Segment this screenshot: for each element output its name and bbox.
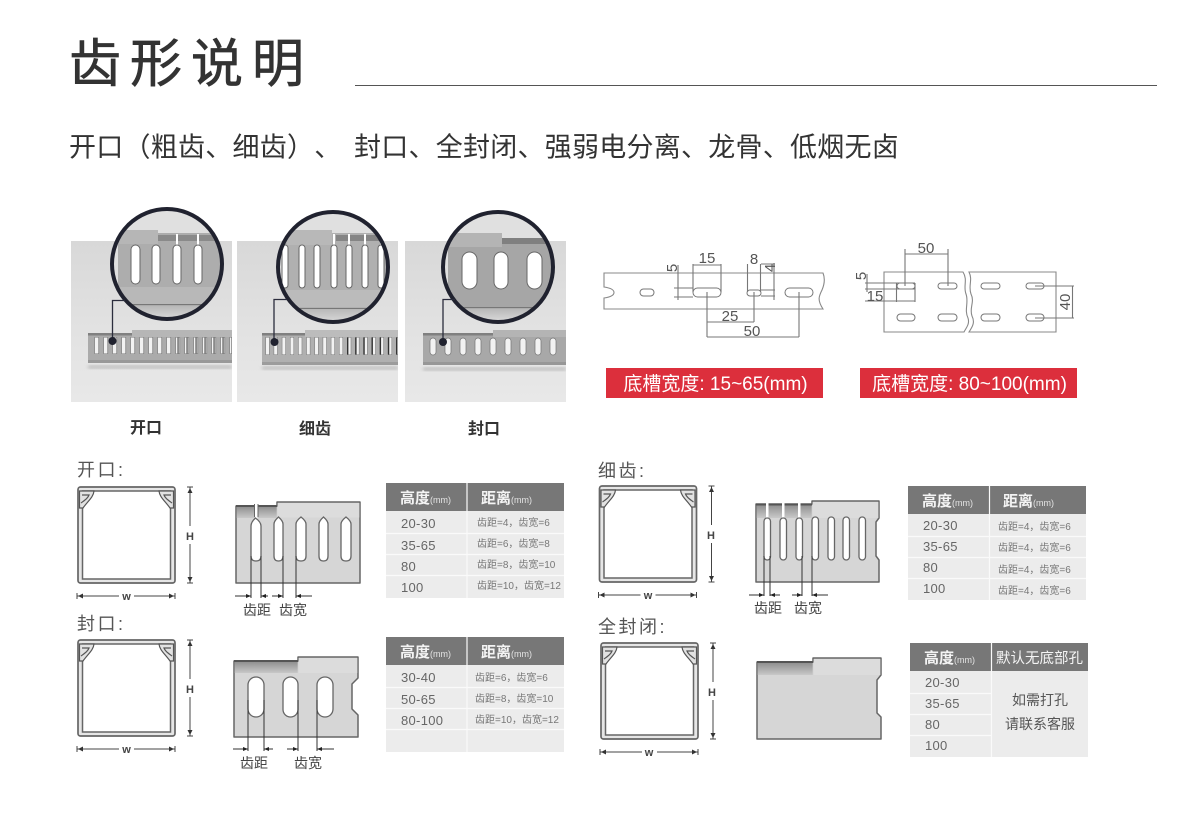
table: fully closed: 高度(mm) [924, 649, 975, 667]
table: closed: 距离(mm) [481, 643, 532, 661]
cross section: closed: w [121, 744, 131, 756]
cross section: open [77, 487, 194, 603]
leader line [439, 300, 455, 346]
dimension labels: open [243, 602, 307, 618]
callout: 80-100 mm [860, 368, 1077, 398]
trunking strip [262, 330, 398, 370]
table: fine tooth: 20-30 [923, 518, 958, 533]
photo caption: closed: 封口 [468, 420, 500, 438]
table: fully closed: 35-65 [925, 696, 960, 711]
photo caption: open: 开口 [130, 420, 162, 437]
table: closed: 齿距=8，齿宽=10 [475, 692, 554, 705]
heading: fine tooth: 细齿: [598, 461, 647, 481]
technical drawing: 80-100 mm base slots [853, 240, 1074, 332]
dimension: 5: 5 [664, 264, 681, 272]
table: open: 齿距=6，齿宽=8 [477, 537, 550, 550]
heading: open: 开口: [77, 460, 126, 480]
tooth drawing: fine tooth [749, 501, 879, 597]
table: open [386, 483, 564, 598]
table: closed: 高度(mm) [400, 643, 451, 661]
leader line [108, 300, 125, 345]
dimension: 15: 15 [867, 288, 883, 305]
table: fine tooth: 齿距=4，齿宽=6 [998, 584, 1071, 597]
heading: fully closed: 全封闭: [598, 617, 667, 637]
panel: closed slot photo [405, 208, 566, 402]
magnifier [440, 208, 555, 328]
tooth drawing: open [235, 502, 360, 598]
cross section: fine tooth [598, 486, 715, 602]
table: fully closed [910, 643, 1088, 757]
table: open: 80 [401, 559, 416, 574]
dimension: 25: 25 [722, 308, 738, 325]
callout: 15-65 mm: 底槽宽度: 15~65(mm) [623, 373, 808, 395]
table: open: 齿距=4，齿宽=6 [477, 516, 550, 529]
cross section: fully closed: w [644, 747, 654, 759]
table: open: 齿距=10，齿宽=12 [477, 579, 561, 592]
table: closed: 30-40 [401, 670, 436, 685]
magnifier [276, 210, 390, 324]
dimension: 4: 4 [762, 264, 779, 272]
table: closed: 80-100 [401, 713, 443, 728]
subtitle: slot types and features: 开口（粗齿、细齿）、 [69, 132, 342, 162]
panel: fine tooth photo [237, 208, 398, 402]
table: fine tooth: 高度(mm) [922, 492, 973, 510]
technical drawing: 15-65 mm base slots [604, 250, 824, 340]
cross section: fully closed: H [708, 687, 716, 699]
dimension labels: closed: 齿宽 [294, 755, 322, 771]
table: fine tooth: 100 [923, 581, 946, 596]
table: closed: 齿距=10，齿宽=12 [475, 713, 559, 726]
trunking strip [423, 330, 566, 371]
magnifier [110, 205, 225, 325]
table: fine tooth: 齿距=4，齿宽=6 [998, 520, 1071, 533]
dimension: 15: 15 [699, 250, 715, 267]
tooth drawing: closed [233, 657, 358, 751]
title rule [355, 84, 1157, 86]
cross section: closed: H [186, 684, 194, 696]
dimension labels: open: 齿距 [243, 602, 271, 618]
table: fully closed: 如需打孔 [1012, 692, 1068, 708]
table: fully closed: 20-30 [925, 675, 960, 690]
table: open: 高度(mm) [400, 489, 451, 507]
dimension labels: fine tooth [754, 600, 822, 616]
table: fully closed: 100 [925, 738, 948, 753]
dimension: 40: 40 [1057, 294, 1074, 310]
leader line [270, 300, 287, 346]
table: open: 齿距=8，齿宽=10 [477, 558, 556, 571]
title: 齿形说明 [69, 36, 313, 94]
dimension: 5: 5 [853, 272, 870, 280]
trunking strip [88, 330, 232, 369]
dimension labels: open: 齿宽 [279, 602, 307, 618]
table: open: 距离(mm) [481, 489, 532, 507]
callout: 15-65 mm [606, 368, 823, 398]
panel: open slot photo [71, 205, 232, 402]
dimension labels: fine tooth: 齿距 [754, 600, 782, 616]
subtitle: slot types and features: 封口、全封闭、强弱电分离、龙骨、低烟无卤 [354, 132, 899, 162]
table: fine tooth: 80 [923, 560, 938, 575]
table: fine tooth: 35-65 [923, 539, 958, 554]
table: open: 20-30 [401, 516, 436, 531]
dimension labels: fine tooth: 齿宽 [794, 600, 822, 616]
dimension: 50: 50 [744, 323, 760, 340]
heading: closed: 封口: [77, 614, 126, 634]
table: fine tooth [908, 486, 1086, 600]
tooth drawing: fully closed [757, 658, 881, 739]
table: fine tooth: 齿距=4，齿宽=6 [998, 541, 1071, 554]
cross section: open: H [186, 531, 194, 543]
cross section: open: w [121, 591, 131, 603]
dimension labels: closed [240, 755, 322, 771]
table: open: 100 [401, 580, 424, 595]
cross section: fine tooth: w [643, 590, 653, 602]
table: closed [386, 637, 564, 752]
dimension labels: closed: 齿距 [240, 755, 268, 771]
cross section: fully closed [600, 643, 716, 759]
dimension: 8: 8 [750, 251, 758, 268]
dimension: 50: 50 [918, 240, 934, 257]
callout: 80-100 mm: 底槽宽度: 80~100(mm) [872, 373, 1067, 395]
table: closed: 50-65 [401, 692, 436, 707]
table: closed: 齿距=6，齿宽=6 [475, 671, 548, 684]
table: fully closed: 默认无底部孔 [996, 650, 1083, 667]
table: fully closed: 80 [925, 717, 940, 732]
table: fully closed: 请联系客服 [1005, 716, 1075, 732]
table: open: 35-65 [401, 538, 436, 553]
table: fine tooth: 齿距=4，齿宽=6 [998, 563, 1071, 576]
cross section: closed [77, 640, 194, 756]
photo caption: fine tooth: 细齿 [299, 420, 331, 438]
cross section: fine tooth: H [707, 530, 715, 542]
table: fine tooth: 距离(mm) [1003, 492, 1054, 510]
